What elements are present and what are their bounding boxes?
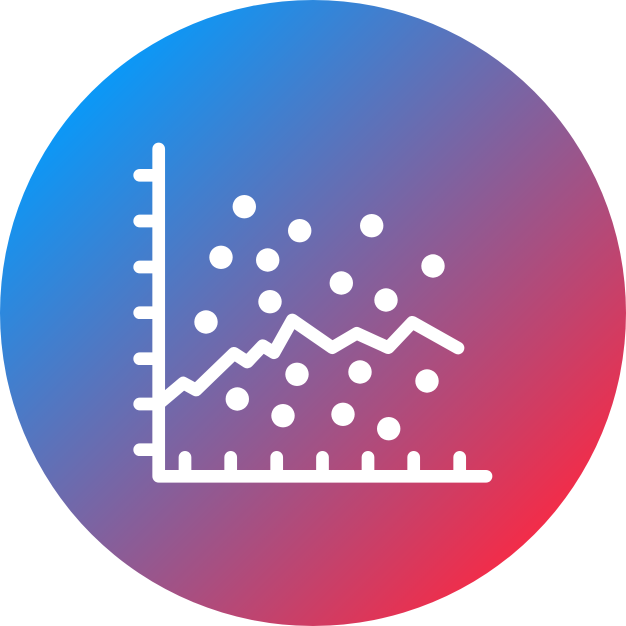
- scatter points: [194, 195, 445, 440]
- y axis ticks: [140, 175, 158, 450]
- chart axes: [140, 149, 486, 476]
- trend line: [159, 320, 458, 404]
- x axis ticks: [185, 457, 460, 476]
